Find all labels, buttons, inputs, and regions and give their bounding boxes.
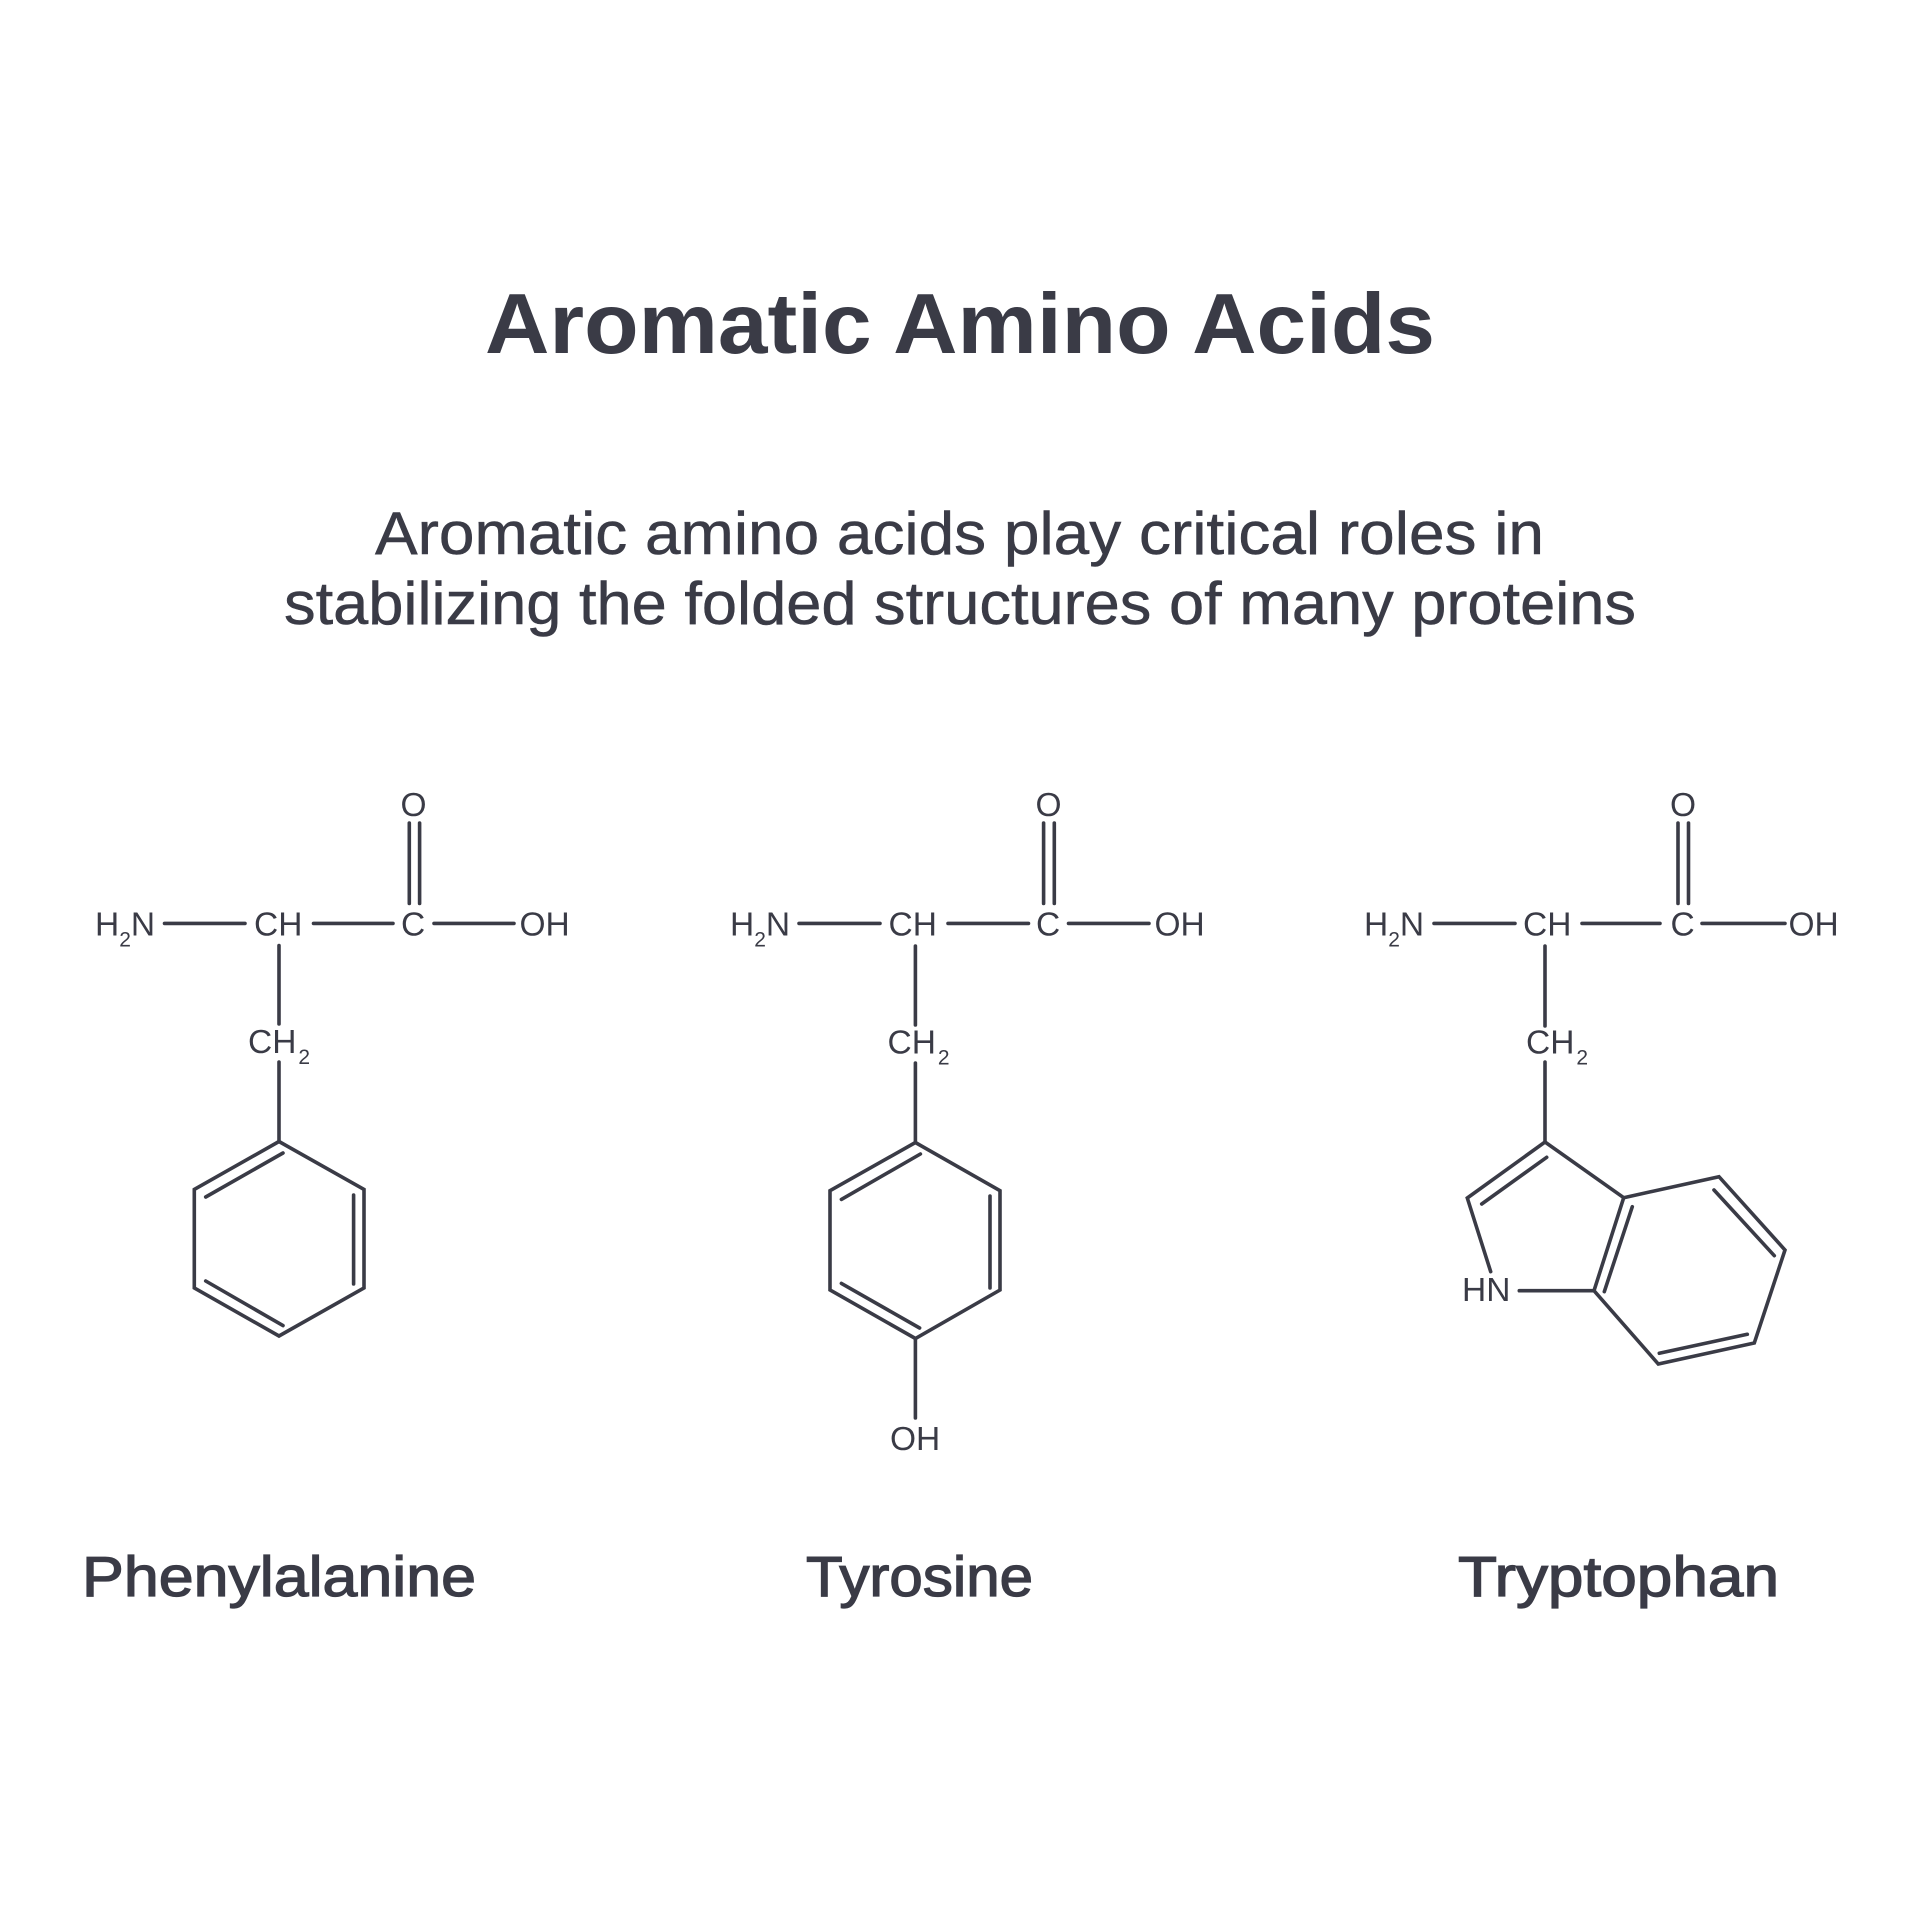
subtitle text block: Aromatic amino acids play critical roles in: [375, 500, 1544, 567]
panel: tyrosine: [730, 787, 1205, 1609]
tryptophan backbone formula: C: [1670, 906, 1695, 944]
phenylalanine backbone formula: C: [401, 906, 425, 944]
tyrosine backbone formula: CH: [888, 906, 937, 944]
tryptophan side chain: [1526, 946, 1588, 1142]
phenylalanine backbone formula: O: [400, 787, 427, 824]
tyrosine backbone formula: N: [766, 906, 790, 944]
icon: benzene ring: [194, 1142, 364, 1336]
tryptophan backbone formula: H: [1364, 906, 1388, 944]
tyrosine backbone formula: O: [1036, 787, 1062, 824]
icon: phenol ring: [830, 1142, 1000, 1338]
icon: indole ring: [1462, 1142, 1785, 1364]
phenylalanine backbone formula: N: [131, 906, 155, 944]
tryptophan side chain: CH: [1526, 1024, 1574, 1062]
panel: phenylalanine: [82, 787, 570, 1609]
phenylalanine side chain: 2: [298, 1046, 310, 1069]
tyrosine backbone formula: C: [1036, 906, 1060, 944]
tryptophan backbone formula: CH: [1523, 906, 1571, 944]
hydroxyl group: OH: [890, 1421, 940, 1458]
tyrosine backbone formula: OH: [1154, 906, 1205, 944]
tryptophan backbone formula: OH: [1788, 906, 1839, 944]
panel: tryptophan: [1364, 787, 1839, 1609]
hydroxyl group: [890, 1338, 940, 1458]
phenylalanine backbone formula: H: [95, 906, 119, 944]
phenylalanine backbone formula: CH: [254, 906, 302, 944]
tryptophan side chain: 2: [1576, 1046, 1588, 1070]
tryptophan backbone formula: 2: [1388, 928, 1400, 952]
tryptophan backbone formula: [1364, 787, 1839, 952]
tryptophan backbone formula: O: [1670, 787, 1696, 824]
tyrosine backbone formula: [730, 787, 1205, 952]
tyrosine backbone formula: 2: [754, 928, 766, 952]
tyrosine label: Tyrosine: [806, 1545, 1033, 1609]
phenylalanine backbone formula: 2: [119, 928, 131, 952]
tyrosine side chain: 2: [938, 1046, 950, 1070]
phenylalanine label: Phenylalanine: [82, 1545, 476, 1609]
phenylalanine backbone formula: OH: [520, 906, 570, 944]
tryptophan label: Tryptophan: [1458, 1545, 1779, 1609]
tyrosine backbone formula: H: [730, 906, 754, 944]
tyrosine side chain: CH: [888, 1024, 936, 1062]
tyrosine side chain: [888, 946, 950, 1142]
subtitle text block: stabilizing the folded structures of many proteins: [284, 570, 1636, 637]
title: Aromatic Amino Acids: [485, 277, 1435, 372]
phenylalanine side chain: CH: [248, 1024, 296, 1061]
phenylalanine backbone formula: [95, 787, 570, 952]
icon: indole ring: HN: [1462, 1272, 1510, 1309]
phenylalanine side chain: [248, 946, 310, 1141]
subtitle text block: [284, 500, 1636, 637]
tryptophan backbone formula: N: [1400, 906, 1424, 944]
